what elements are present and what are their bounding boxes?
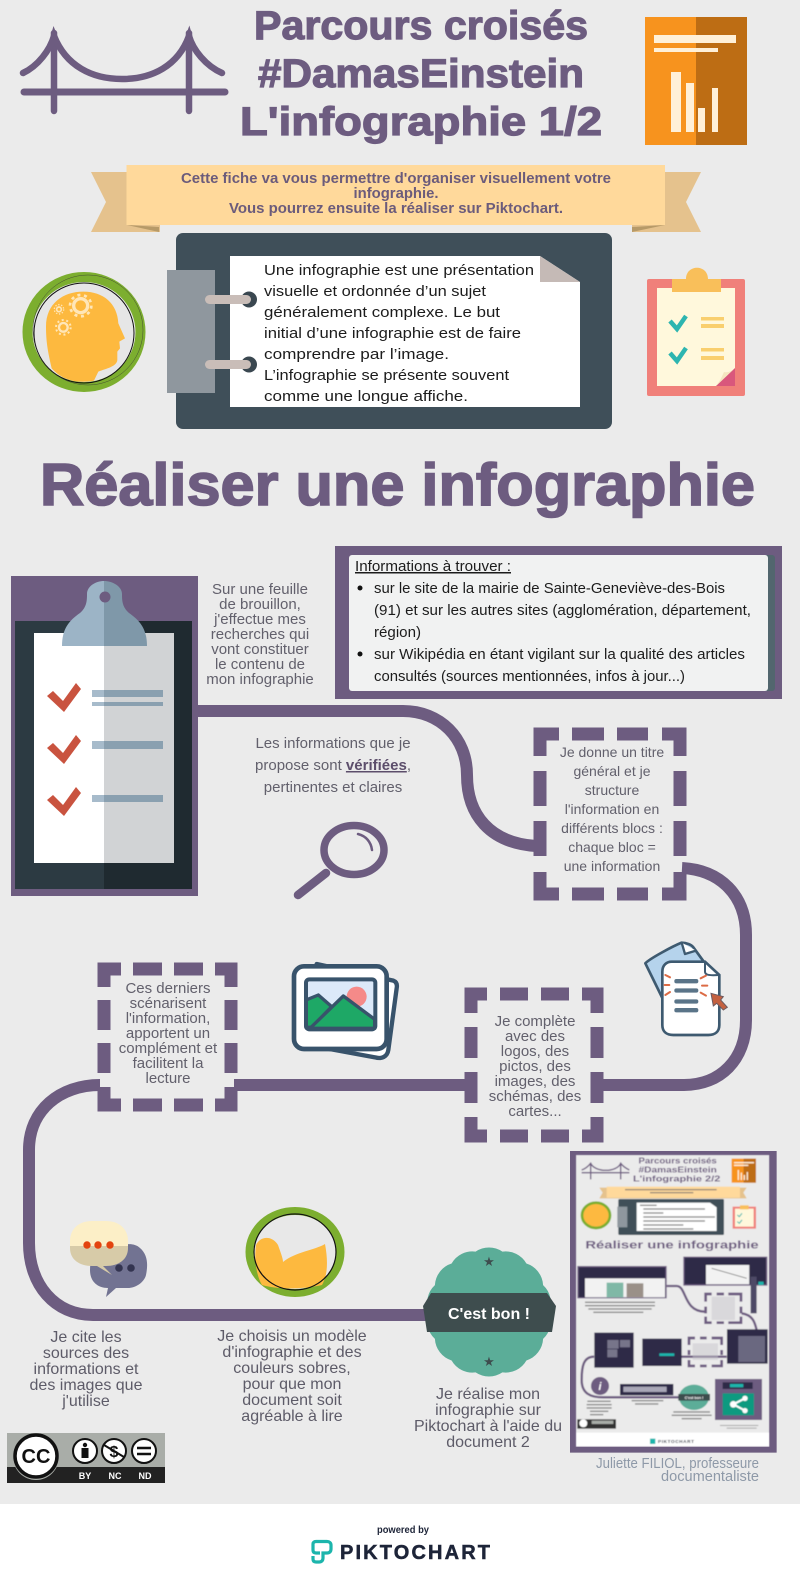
- dashed box: title and blocks: différents blocs :: [561, 820, 663, 836]
- dashed box: scenario: complément et: [119, 1040, 218, 1057]
- dashed box: logos and images: images, des: [495, 1073, 575, 1090]
- dashed box: logos and images: logos, des: [501, 1043, 569, 1060]
- text: verified information: [255, 735, 411, 796]
- thumbnail: document 2 preview: #DamasEinstein: [638, 1164, 717, 1174]
- dashed box: logos and images: pictos, des: [499, 1058, 571, 1075]
- text: make it on Piktochart: infographie sur: [435, 1402, 542, 1419]
- icon: book in ring: [250, 1211, 340, 1293]
- thumbnail: document 2 preview: Réaliser une infographie: [585, 1240, 759, 1252]
- licence badge: BY: [79, 1471, 91, 1481]
- licence badge: ND: [138, 1471, 152, 1481]
- text: make it on Piktochart: [414, 1386, 562, 1451]
- dashed box: scenario: [104, 969, 231, 1105]
- text: research step: mon infographie: [206, 671, 314, 688]
- panel: information to find: (91) et sur les autres sites (agglomération, département,: [374, 602, 751, 619]
- icon: photos: [294, 964, 397, 1058]
- dashed box: logos and images: avec des: [505, 1028, 565, 1045]
- text: cite sources: j'utilise: [61, 1393, 110, 1410]
- binder rings: [205, 292, 257, 372]
- icon: Piktochart logo: [313, 1542, 331, 1562]
- definition text: initial d’une infographie est de faire: [264, 325, 521, 342]
- dashed box: title and blocks: une information: [564, 858, 660, 874]
- text: research step: recherches qui: [211, 626, 309, 643]
- panel: definition board: [167, 233, 612, 429]
- text: cite sources: Je cite les: [50, 1329, 122, 1346]
- text: verified information: Les informations que je: [255, 735, 411, 752]
- panel: information to find: sur Wikipédia en étant vigilant sur la qualité des articles: [374, 646, 745, 663]
- dashed box: scenario: l'information,: [126, 1010, 210, 1027]
- icon: orange report: [645, 17, 747, 145]
- thumbnail: document 2 preview: C'est bon !: [685, 1396, 703, 1400]
- credit: [596, 1456, 759, 1485]
- badge: c'est bon: ★: [483, 1354, 495, 1369]
- thumbnail: document 2 preview: L'infographie 2/2: [633, 1174, 721, 1184]
- footer: powered by Piktochart: powered by: [377, 1525, 429, 1536]
- icon: large clipboard: [11, 576, 198, 896]
- dashed box: scenario: lecture: [145, 1070, 191, 1087]
- credit: Juliette FILIOL, professeure: [596, 1456, 759, 1472]
- text: research step: Sur une feuille: [212, 581, 308, 598]
- badge: c'est bon: [423, 1248, 556, 1376]
- dashed box: title and blocks: général et je: [573, 763, 651, 779]
- title: L'infographie 1/2: [240, 100, 602, 144]
- text: choose template: document soit: [242, 1392, 342, 1409]
- text: research step: j'effectue mes: [213, 611, 306, 628]
- banner text: [181, 171, 611, 217]
- footer: powered by Piktochart: [313, 1525, 490, 1564]
- text: make it on Piktochart: Je réalise mon: [436, 1386, 540, 1403]
- text: make it on Piktochart: document 2: [446, 1434, 530, 1451]
- thumbnail: document 2 preview: Parcours croisés: [638, 1155, 717, 1165]
- dashed box: scenario: facilitent la: [133, 1055, 204, 1072]
- banner text: Vous pourrez ensuite la réaliser sur Piktochart.: [229, 201, 563, 217]
- dashed box: scenario: apportent un: [126, 1025, 210, 1042]
- title: [240, 4, 602, 144]
- icon: magnifying glass: [298, 826, 384, 895]
- dashed box: logos and images: [471, 994, 597, 1136]
- dashed box: scenario: Ces derniers: [125, 980, 211, 997]
- section heading: Réaliser une infographie: [40, 452, 755, 518]
- dashed box: logos and images: schémas, des: [489, 1088, 581, 1105]
- icon: bridge: [23, 33, 225, 111]
- panel: information to find: Informations à trouver :: [355, 558, 511, 575]
- definition text: visuelle et ordonnée d’un sujet: [264, 283, 487, 300]
- thumbnail: document 2 preview: [570, 1151, 777, 1453]
- text: choose template: couleurs sobres,: [233, 1360, 351, 1377]
- definition text: [264, 262, 534, 405]
- credit: documentaliste: [661, 1469, 759, 1485]
- dashed box: title and blocks: Je donne un titre: [560, 744, 664, 760]
- panel: information to find: [335, 546, 782, 699]
- text: verified information: propose sont vérifiées,: [255, 757, 411, 774]
- paper sheet: [230, 256, 580, 407]
- panel: information to find: sur le site de la mairie de Sainte-Geneviève-des-Bois: [374, 580, 725, 597]
- licence badge: NC: [108, 1471, 122, 1481]
- text: choose template: [217, 1328, 367, 1425]
- banner text: infographie.: [354, 186, 438, 202]
- title: Parcours croisés: [254, 4, 588, 48]
- thumbnail: document 2 preview: PIKTOCHART: [658, 1439, 694, 1444]
- badge: c'est bon: C'est bon !: [448, 1306, 530, 1323]
- text: cite sources: des images que: [30, 1377, 143, 1394]
- text: choose template: d'infographie et des: [222, 1344, 362, 1361]
- icon: documents with cursor: [645, 943, 727, 1035]
- text: research step: vont constituer: [211, 641, 309, 658]
- dashed box: logos and images: cartes...: [508, 1103, 562, 1120]
- dashed box: title and blocks: structure: [585, 782, 639, 798]
- dashed box: title and blocks: chaque bloc =: [568, 839, 656, 855]
- text: research step: le contenu de: [215, 656, 305, 673]
- banner: [91, 165, 701, 232]
- dashed box: scenario: scénarisent: [130, 995, 207, 1012]
- text: verified information: pertinentes et claires: [264, 779, 402, 796]
- definition text: comprendre par l’image.: [264, 346, 449, 363]
- text: cite sources: sources des: [43, 1345, 129, 1362]
- definition text: Une infographie est une présentation: [264, 262, 534, 279]
- footer: powered by Piktochart: PIKTOCHART: [340, 1542, 490, 1564]
- text: choose template: agréable à lire: [241, 1408, 343, 1425]
- icon: head with gears: [28, 275, 143, 387]
- panel: information to find: consultés (sources mentionnées, infos à jour...): [374, 668, 685, 685]
- badge: c'est bon: ★: [483, 1254, 495, 1269]
- definition text: comme une longue affiche.: [264, 388, 468, 405]
- icon: pink clipboard: [647, 268, 745, 396]
- title: #DamasEinstein: [258, 52, 584, 96]
- licence badge: CC: [22, 1446, 50, 1468]
- panel: information to find: région): [374, 624, 421, 641]
- licence badge: $: [110, 1444, 119, 1461]
- text: choose template: pour que mon: [243, 1376, 341, 1393]
- dashed box: title and blocks: l'information en: [565, 801, 659, 817]
- text: research step: [206, 581, 314, 688]
- dashed box: title and blocks: [540, 734, 680, 894]
- text: cite sources: [30, 1329, 143, 1410]
- definition text: L’infographie se présente souvent: [264, 367, 510, 384]
- text: research step: de brouillon,: [219, 596, 301, 613]
- connecting path: [29, 711, 746, 1315]
- definition text: généralement complexe. Le but: [264, 304, 501, 321]
- banner text: Cette fiche va vous permettre d'organiser visuellement votre: [181, 171, 611, 187]
- icon: speech bubbles: [70, 1221, 147, 1297]
- text: cite sources: informations et: [34, 1361, 139, 1378]
- dashed box: logos and images: Je complète: [495, 1013, 575, 1030]
- licence badge: [7, 1433, 165, 1483]
- text: choose template: Je choisis un modèle: [217, 1328, 367, 1345]
- thumbnail: document 2 preview: i: [599, 1381, 603, 1393]
- text: make it on Piktochart: Piktochart à l'aide du: [414, 1418, 562, 1435]
